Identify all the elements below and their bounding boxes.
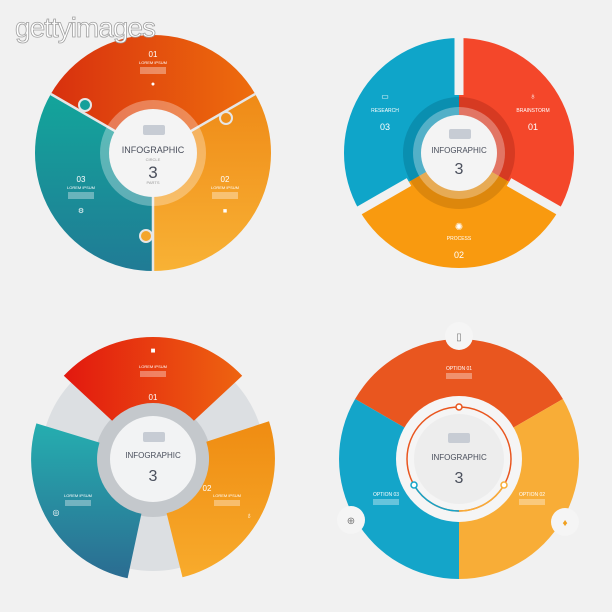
panel: separated segments (bottom-left): ♁ — [246, 511, 252, 520]
ring arcs — [407, 407, 511, 511]
center disc — [110, 416, 196, 502]
labels: LOREM IPSUM — [67, 185, 95, 190]
icon circles — [337, 322, 579, 536]
center text: 3 — [148, 163, 158, 182]
center ring — [100, 100, 206, 206]
panel: separated segments (bottom-left): 3 — [149, 468, 158, 485]
labels: ▭ — [381, 92, 389, 101]
panel: options circle (bottom-right): OPTION 03 — [373, 492, 399, 498]
sector: orange option 02 — [459, 399, 579, 579]
center white disc — [396, 396, 522, 522]
labels: 01 — [528, 122, 538, 132]
panel: options circle (bottom-right): ♦ — [562, 518, 568, 529]
labels: LOREM IPSUM — [139, 60, 167, 65]
labels — [371, 91, 550, 260]
sector: red option 01 — [355, 339, 563, 459]
labels: 03 — [380, 122, 390, 132]
labels: 02 — [221, 175, 230, 184]
panel: options circle (bottom-right): ⊕ — [347, 516, 355, 527]
labels: ✺ — [455, 222, 463, 233]
labels: 01 — [149, 50, 158, 59]
panel: separated segments (bottom-left): LOREM IPSUM — [64, 493, 92, 498]
sector: teal — [31, 423, 141, 578]
center text: PARTS — [147, 180, 160, 185]
sector: red 01 — [64, 337, 242, 421]
watermark: gettyimages: gettyimages — [15, 12, 155, 43]
labels: ♁ — [530, 91, 536, 101]
panel: separated segments (bottom-left) — [31, 337, 275, 578]
center text: INFOGRAPHIC — [122, 145, 185, 155]
panel: gapped circle (top-right) — [344, 30, 574, 268]
panel: separated segments (bottom-left): LOREM IPSUM — [139, 364, 167, 369]
center disc — [109, 109, 197, 197]
sector: orange 02 — [167, 421, 275, 577]
sector: orange process — [359, 153, 559, 268]
panel: separated segments (bottom-left): ◎ — [53, 508, 60, 517]
labels: LOREM IPSUM — [211, 185, 239, 190]
labels: RESEARCH — [371, 108, 399, 114]
panel: options circle (bottom-right): ▯ — [456, 332, 462, 343]
sector: red brainstorm — [459, 38, 574, 210]
panel: options circle (bottom-right): OPTION 01 — [446, 366, 472, 372]
panel: gapped circle (top-right): 3 — [455, 161, 464, 178]
inner rings — [403, 97, 459, 181]
sector: blue research — [344, 38, 459, 210]
sector: red 01 — [51, 35, 255, 153]
center text: CIRCLE — [146, 157, 161, 162]
panel: options circle (bottom-right): 3 — [455, 470, 464, 487]
labels: PROCESS — [447, 236, 472, 242]
labels: 03 — [77, 175, 86, 184]
center disc — [421, 115, 497, 191]
panel: options circle (bottom-right): OPTION 02 — [519, 492, 545, 498]
labels — [67, 50, 239, 215]
panel: puzzle circle (top-left) — [35, 35, 271, 271]
center text — [122, 125, 185, 185]
panel: options circle (bottom-right): INFOGRAPHIC — [431, 453, 487, 462]
labels: ⚙ — [78, 207, 84, 215]
panel: gapped circle (top-right): INFOGRAPHIC — [431, 146, 487, 155]
puzzle knobs — [79, 99, 232, 242]
panel: separated segments (bottom-left): 02 — [203, 484, 212, 493]
sector: orange 02 — [153, 94, 271, 271]
panel: separated segments (bottom-left): ■ — [151, 346, 156, 355]
panel: separated segments (bottom-left): LOREM IPSUM — [213, 493, 241, 498]
gray base ring — [41, 347, 265, 571]
labels: ● — [151, 81, 155, 88]
sector: blue option 03 — [339, 399, 459, 579]
panel: options circle (bottom-right) — [337, 322, 579, 579]
panel: separated segments (bottom-left): INFOGRAPHIC — [125, 451, 181, 460]
labels: 02 — [454, 250, 464, 260]
panel: separated segments (bottom-left): 01 — [149, 393, 158, 402]
labels: ■ — [223, 208, 227, 215]
labels: BRAINSTORM — [516, 108, 550, 114]
sector: teal 03 — [35, 94, 153, 271]
